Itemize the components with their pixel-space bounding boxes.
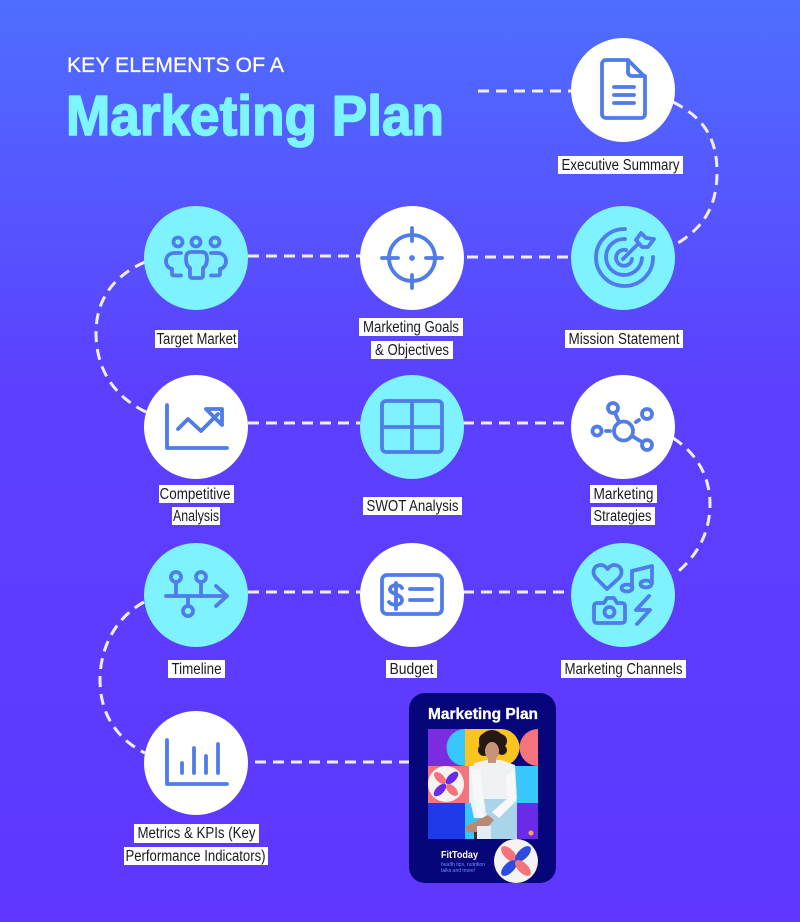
- node: swot analysis: [360, 375, 464, 515]
- flower logo: [434, 772, 458, 796]
- label: [590, 485, 657, 525]
- node: marketing strategies: [571, 375, 675, 525]
- node: competitive analysis: [144, 375, 248, 525]
- brand text: FitToday: [441, 849, 478, 861]
- label: Metrics & KPIs (Key: [138, 825, 256, 842]
- icon: timeline arrow: [166, 572, 227, 616]
- poster title: Marketing Plan: [428, 706, 538, 723]
- label: [359, 318, 463, 359]
- node: marketing goals: [359, 206, 464, 359]
- poster: marketing plan cover: health tips, nutrition: [441, 862, 485, 868]
- label: Marketing: [594, 486, 654, 503]
- icon: target with arrow: [596, 229, 654, 286]
- poster artwork: [428, 729, 538, 839]
- label: Mission Statement: [568, 331, 680, 348]
- dashed connector path: [96, 91, 717, 762]
- icon: bill with dollar sign: [382, 575, 442, 614]
- node: executive summary: [558, 38, 683, 174]
- icon: four quadrant grid: [382, 401, 442, 452]
- label: Analysis: [173, 508, 219, 525]
- main heading: Marketing Plan: [66, 84, 444, 148]
- icon: crosshair: [382, 228, 442, 288]
- icon: line chart: [167, 405, 227, 448]
- label: Competitive: [160, 486, 230, 503]
- poster: marketing plan cover: [409, 693, 556, 883]
- label: [124, 824, 268, 865]
- icon: people: [166, 238, 226, 278]
- subtitle: KEY ELEMENTS OF A: [67, 54, 284, 77]
- label: Performance Indicators): [126, 848, 266, 865]
- label: Strategies: [594, 508, 652, 525]
- node: budget: [360, 543, 464, 678]
- poster: marketing plan cover: talks and more!: [441, 868, 475, 874]
- label: SWOT Analysis: [366, 498, 459, 515]
- label: Executive Summary: [562, 157, 680, 174]
- large logo badge: [494, 839, 538, 883]
- node: metrics and KPIs: [124, 711, 268, 865]
- label: Marketing Channels: [564, 661, 683, 678]
- icon: document: [602, 60, 645, 118]
- woman photo: [466, 730, 517, 839]
- label: & Objectives: [375, 342, 449, 359]
- node: target market: [144, 206, 248, 348]
- label: Marketing Goals: [363, 319, 459, 336]
- node: mission statement: [565, 206, 683, 348]
- label: Budget: [390, 661, 434, 678]
- title: [66, 54, 444, 148]
- icon: bar chart: [167, 740, 227, 784]
- node: marketing channels: [561, 543, 686, 678]
- label: Timeline: [172, 661, 222, 678]
- icon: network: [592, 403, 652, 450]
- icon: social channels: [594, 565, 652, 624]
- node: timeline: [144, 543, 248, 678]
- label: [159, 485, 234, 525]
- label: Target Market: [156, 331, 237, 348]
